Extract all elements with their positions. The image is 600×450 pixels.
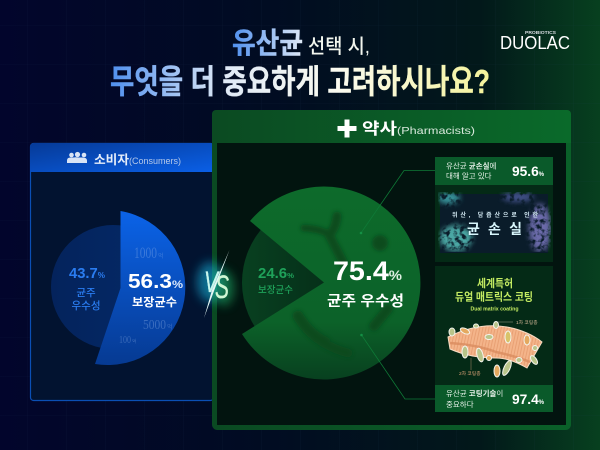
faint count labels: 100 [119,334,131,346]
title: 선택 시, [308,35,370,58]
label 24.6%: 보장균수 [258,284,293,296]
consumers header [30,143,214,172]
logo: Duolac: DUOLAC [500,32,570,53]
label 43.7%: 43.7% [69,266,105,282]
title [110,27,490,100]
VS badge: S [215,269,229,305]
label 75.4% [327,256,404,310]
VS badge [197,250,234,318]
icon: people [67,152,87,163]
faint count labels [119,245,173,346]
label 75.4%: 75.4% [333,256,403,286]
connector: top [361,170,436,233]
card: dual matrix coating: 유산균 코팅기술이 [446,388,503,398]
icon: cross [338,120,356,138]
card: dual matrix coating [435,266,553,412]
faint count labels: 5000 [143,318,166,333]
label 24.6%: 24.6% [258,266,294,282]
label 43.7% [69,266,105,312]
pie: 75.4% strain superiority [242,187,420,380]
pharmacists heading: 약사 [362,120,397,138]
label 56.3% [128,271,183,309]
label 56.3%: 56.3 % [128,271,183,293]
illustration: coating membrane [448,322,542,377]
panel: consumers [30,143,214,400]
faint count labels: 억 [132,338,137,345]
faint count labels: 억 [158,252,164,260]
card: strain loss [435,157,553,262]
image: strain loss: 균 손 실 [467,221,522,237]
coating heading: 세계특허 [477,276,513,290]
coating label: layer 1: 1차 코팅층 [516,319,538,326]
pie: 56.3% guaranteed count [95,211,185,365]
faint count labels: 1000 [134,245,157,262]
label 75.4%: 균주 우수성 [327,293,404,310]
stat bar 95.6% [435,157,553,185]
bacteria shapes [298,216,388,353]
card: strain loss: 95.6% [512,163,545,179]
pharmacists header [212,110,571,143]
card: dual matrix coating: 중요하다 [446,399,474,409]
card: strain loss: 유산균 균손실에 [446,160,496,170]
label 43.7%: 우수성 [72,300,100,312]
label 56.3%: 보장균수 [132,296,177,309]
panel: pharmacists: (Pharmacists) [397,125,475,137]
card: dual matrix coating: 97.4% [512,391,545,407]
panel: pharmacists [212,110,571,428]
coating label: layer 2: 2차 코팅층 [459,370,481,377]
label 24.6% [258,266,294,296]
title: 무엇을 더 중요하게 고려하시나요? [110,63,490,100]
panel: consumers: (Consumers) [129,156,181,166]
image: strain loss: 위산, 담즙산으로 인한 [452,211,538,219]
title: 유산균 [232,27,303,60]
faint count labels: 억 [167,323,173,331]
VS badge: V [204,266,220,299]
pie: 43.7% strain superiority [51,225,175,349]
stat bar 97.4% [435,385,553,412]
card: strain loss: 대해 알고 있다 [446,170,492,180]
image: strain loss [438,192,551,253]
card: dual matrix coating: 듀얼 매트릭스 코팅 [455,290,533,304]
consumers heading: 소비자 [94,153,129,167]
card: dual matrix coating: Dual matrix coating [470,306,518,312]
pie: 24.6% guaranteed count [242,200,408,366]
label 43.7%: 균주 [76,287,96,299]
logo: Duolac: PROBIOTICS [525,30,556,35]
connector: bottom [362,335,436,399]
